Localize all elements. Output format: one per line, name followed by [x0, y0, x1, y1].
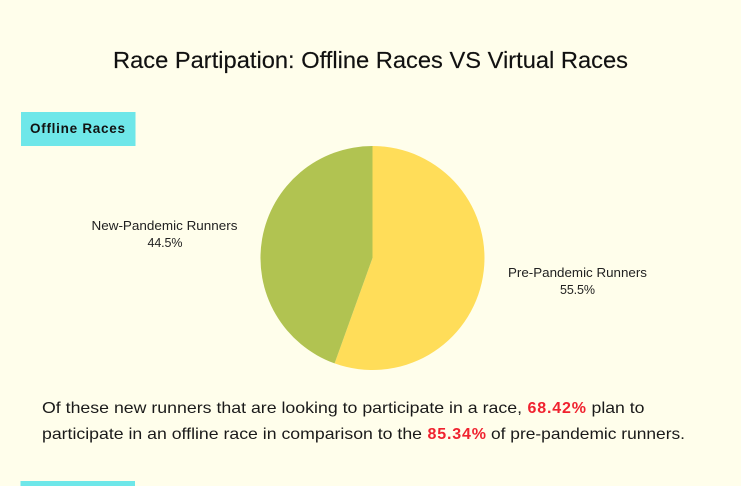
- body text: of pre-pandemic runners.: [491, 426, 685, 443]
- body text: plan to: [592, 400, 645, 417]
- highlight: 85.34%: 85.34%: [428, 426, 486, 443]
- body text: [42, 400, 685, 443]
- section tag: offline races: [21, 112, 136, 146]
- label: pre-pandemic runners: 55.5%: [560, 283, 595, 297]
- label: new-pandemic runners: 44.5%: [148, 236, 182, 250]
- label: pre-pandemic runners: Pre-Pandemic Runners: [508, 266, 647, 280]
- label: pre-pandemic runners: [508, 266, 647, 297]
- highlight: 68.42%: 68.42%: [528, 400, 586, 417]
- section tag: offline races: Offline Races: [30, 121, 125, 136]
- title: Race Partipation: Offline Races VS Virtual Races: [113, 47, 628, 73]
- pie slice: new-pandemic runners: [260, 146, 372, 363]
- body text: Of these new runners that are looking to participate in a race,: [42, 400, 522, 417]
- body text: participate in an offline race in comparison to the: [42, 426, 422, 443]
- pie slice: pre-pandemic runners: [335, 146, 484, 370]
- label: new-pandemic runners: New-Pandemic Runners: [92, 219, 238, 233]
- pie chart: [260, 146, 484, 370]
- section tag: cut-off next section: [20, 481, 135, 486]
- label: new-pandemic runners: [92, 219, 238, 250]
